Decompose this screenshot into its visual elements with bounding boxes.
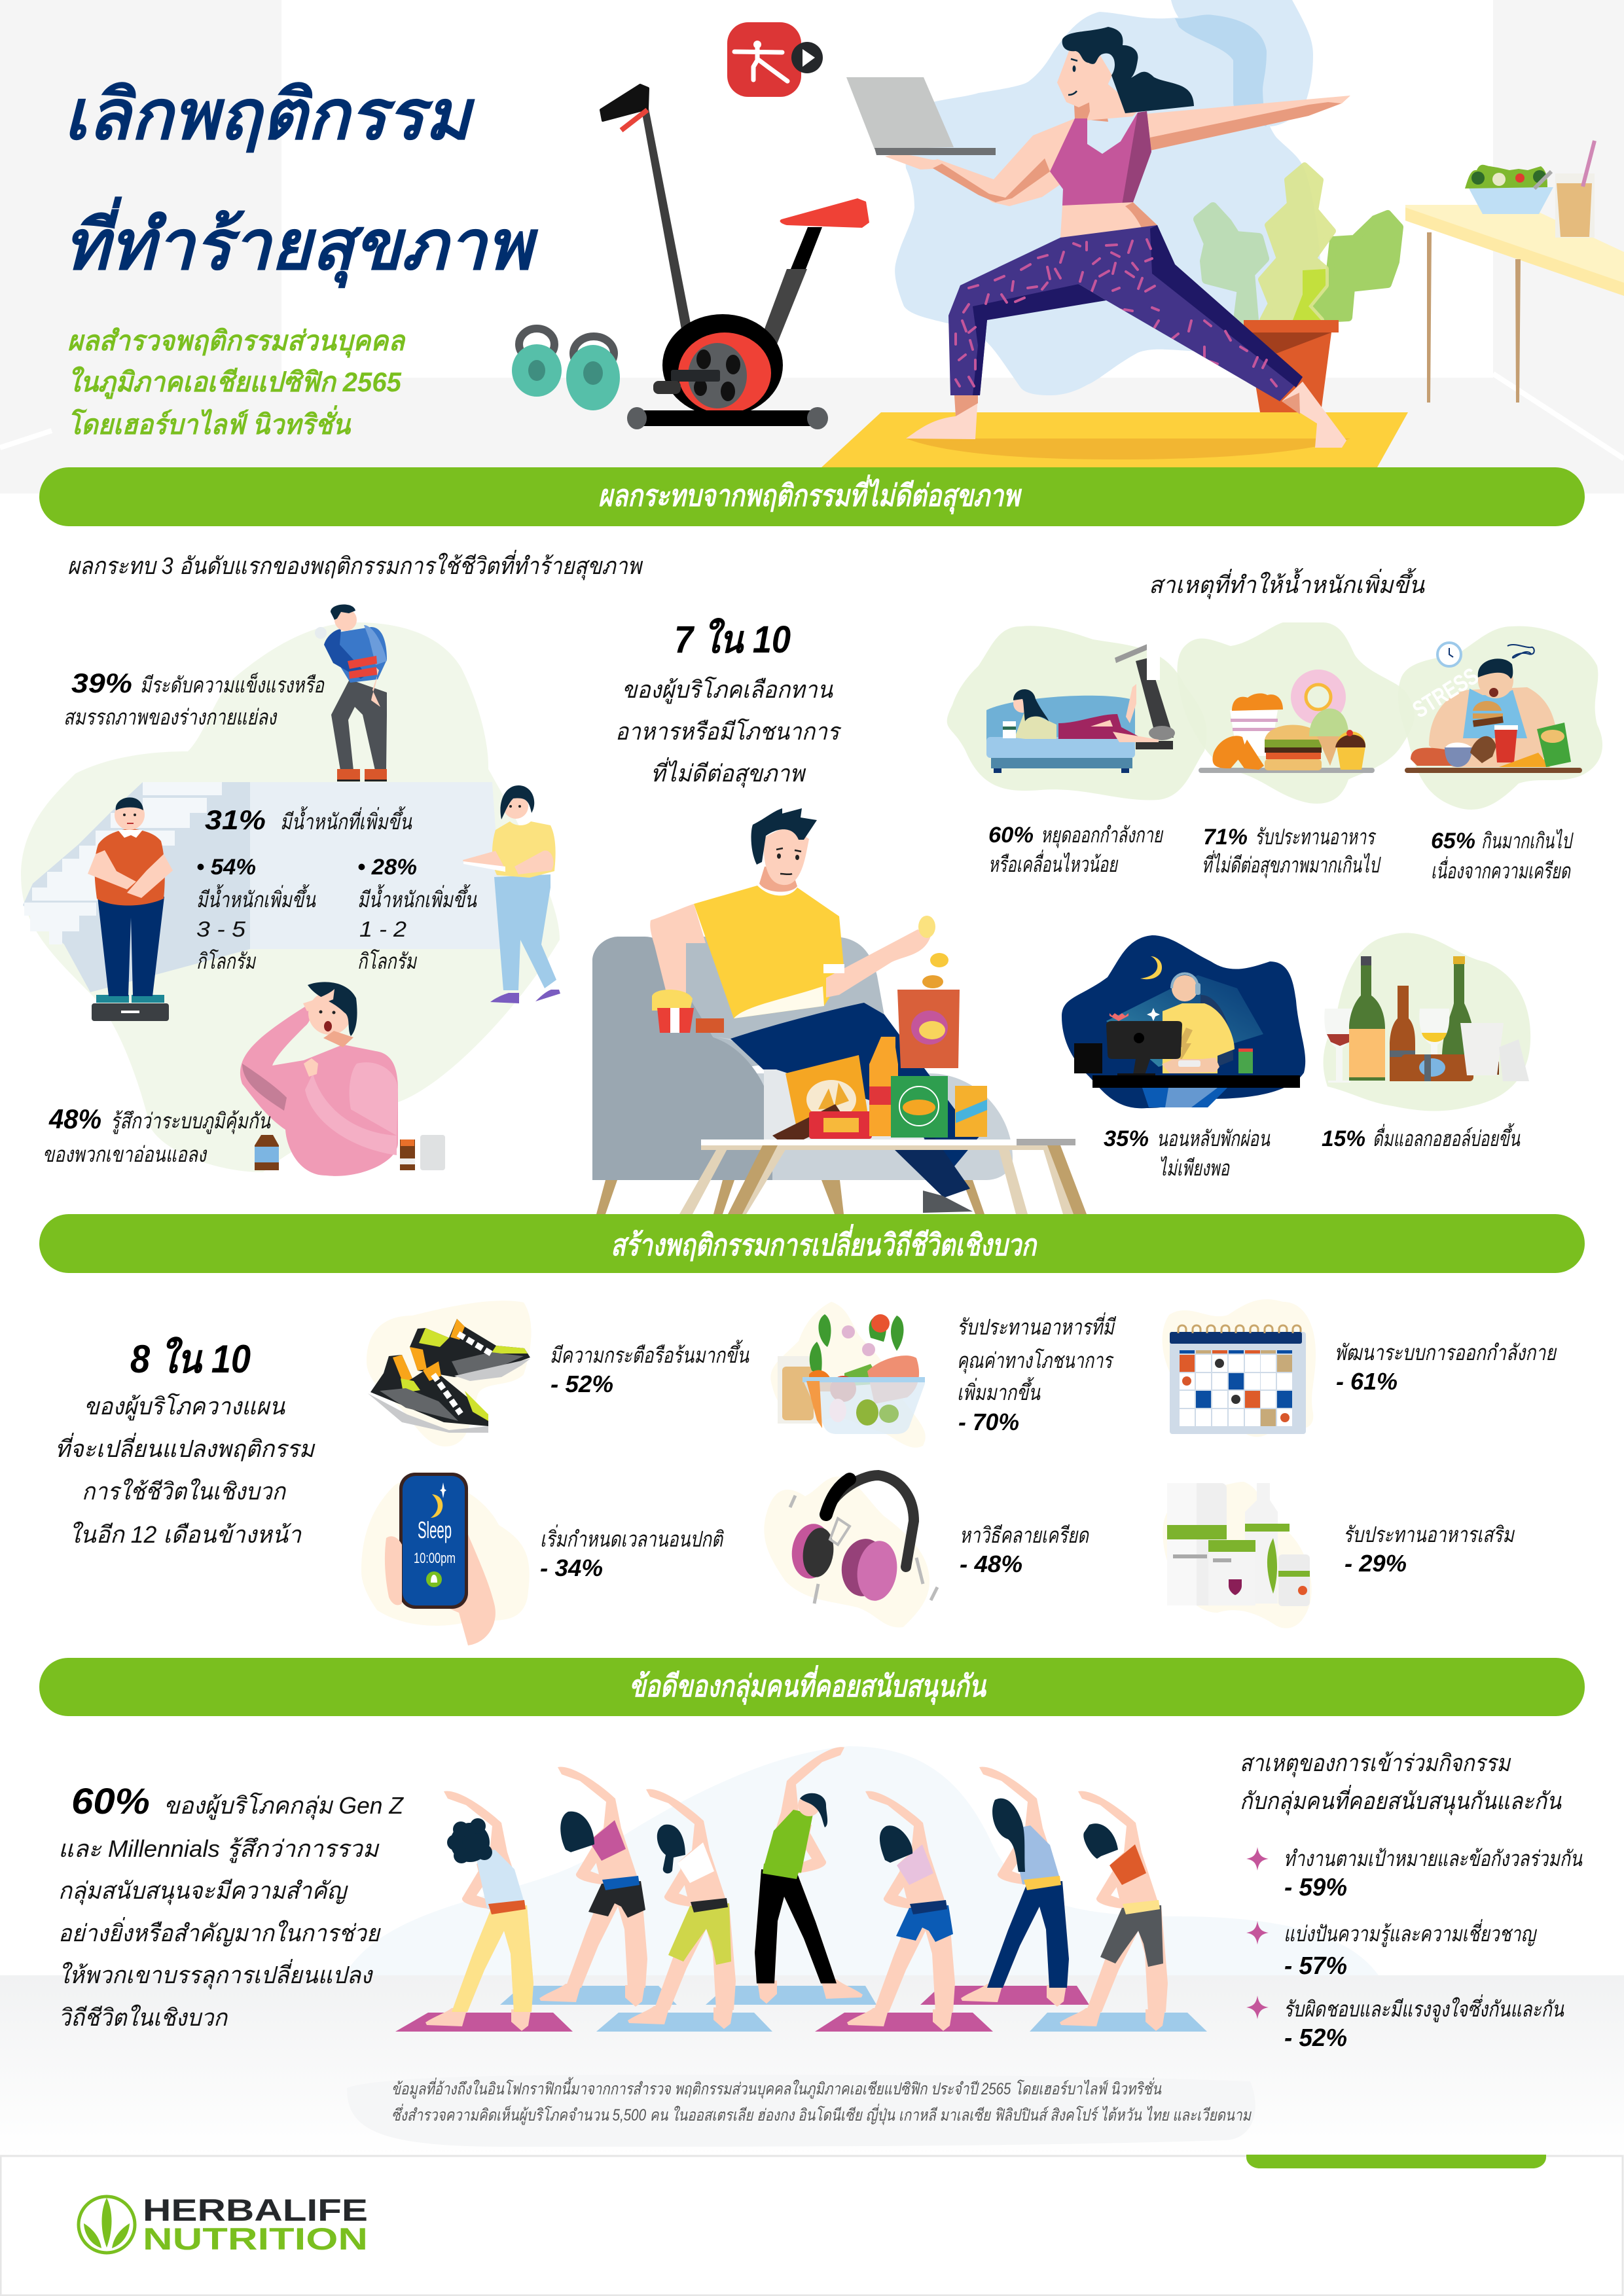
illustration: workout calendar	[1163, 1299, 1316, 1437]
text: nutritious food: - 70%	[958, 1408, 1019, 1435]
text: sleep schedule: - 34%	[540, 1554, 603, 1581]
subtitle: ผลสำรวจพฤติกรรมส่วนบุคคล	[67, 325, 406, 358]
stat: 48% immunity: รู้สึกว่าระบบภูมิคุ้มกัน	[111, 1109, 271, 1134]
stat: 7 in 10: 7 ใน 10	[674, 618, 791, 661]
panel: impact figures background	[21, 622, 560, 1172]
illustration: running shoes	[367, 1300, 532, 1446]
stat: 7 in 10: อาหารหรือมีโภชนาการ	[615, 718, 842, 745]
logo: Herbalife Nutrition	[79, 2193, 368, 2256]
text: stress relief: - 48%	[960, 1551, 1022, 1577]
subtitle: ในภูมิภาคเอเชียแปซิฟิก 2565	[67, 366, 402, 399]
icon: exercise app	[727, 22, 823, 97]
list: reasons: รับผิดชอบและมีแรงจูงใจซึ่งกันและกัน	[1284, 1994, 1564, 2022]
stat: 31% weight gain: • 54%	[196, 855, 256, 880]
stats: causes row 1: 71%	[1203, 825, 1248, 850]
stat: 31% weight gain: กิโลกรัม	[196, 949, 257, 973]
stat: 60 percent supporting group	[58, 1780, 404, 2031]
stat: 31% weight gain: มีน้ำหนักที่เพิ่มขึ้น	[280, 806, 412, 834]
stat: 8 in 10: ที่จะเปลี่ยนแปลงพฤติกรรม	[55, 1432, 316, 1462]
illustration: table with salad and drink	[1405, 141, 1624, 403]
banner: create positive lifestyle change	[39, 1214, 1585, 1273]
text: nutritious food: เพิ่มมากขึ้น	[957, 1377, 1041, 1405]
stat: 39% physical strength: มีระดับความแข็งแรงหรือ	[140, 672, 325, 697]
list: reasons	[1246, 1846, 1583, 2052]
illustration: overweight woman with tape	[463, 785, 560, 1003]
text: workout routine: พัฒนาระบบการออกกำลังกาย	[1335, 1340, 1557, 1365]
stat: 8 in 10	[55, 1336, 316, 1548]
list: reasons: - 57%	[1284, 1952, 1347, 1980]
illustration: sleep phone: Sleep	[418, 1516, 452, 1543]
illustration: unhealthy food	[1177, 622, 1415, 804]
footer box	[1, 2155, 1623, 2295]
text: sleep schedule	[540, 1524, 724, 1581]
stat: 60 percent supporting group: และ Millennials รู้สึกว่าการรวม	[58, 1835, 380, 1863]
text: nutritious food	[957, 1312, 1116, 1435]
stats: causes row 1: 60%	[988, 823, 1034, 848]
stat: 31% weight gain: 31%	[205, 804, 266, 835]
illustration: overweight man on scale	[88, 797, 173, 1021]
stats: causes row 2: 35%	[1104, 1126, 1149, 1151]
stats: causes row 2: 15%	[1322, 1126, 1365, 1151]
stats: causes row 1: ที่ไม่ดีต่อสุขภาพมากเกินไป	[1202, 850, 1381, 878]
banner: create positive lifestyle change: สร้างพฤติกรรมการเปลี่ยนวิถีชีวิตเชิงบวก	[611, 1223, 1038, 1262]
stat: 31% weight gain: 3 - 5	[196, 917, 246, 941]
subtitle: โดยเฮอร์บาไลฟ์ นิวทริชั่น	[67, 405, 352, 440]
stat: 8 in 10: การใช้ชีวิตในเชิงบวก	[82, 1478, 287, 1505]
banner: benefits of support groups	[39, 1658, 1585, 1716]
stat: 31% weight gain: • 28%	[357, 855, 417, 880]
stat: 60 percent supporting group: ของผู้บริโภคกลุ่ม Gen Z	[164, 1792, 404, 1820]
stat: 60 percent supporting group: ให้พวกเขาบรรลุการเปลี่ยนแปลง	[58, 1958, 373, 1990]
stat: 31% weight gain	[196, 804, 477, 973]
stat: 48% immunity: 48%	[48, 1103, 101, 1134]
stats: causes row 1: 65%	[1431, 829, 1475, 853]
illustration: lazy on sofa	[947, 626, 1207, 800]
list: reasons: แบ่งปันความรู้และความเชี่ยวชาญ	[1284, 1919, 1537, 1947]
stat: 60 percent supporting group: กลุ่มสนับสนุนจะมีความสำคัญ	[58, 1877, 348, 1905]
footnote	[391, 2077, 1252, 2125]
logo: Herbalife Nutrition: HERBALIFE	[143, 2193, 368, 2227]
text: workout routine: - 61%	[1336, 1368, 1398, 1395]
banner: impact of unhealthy behaviours	[39, 467, 1585, 526]
illustration: tired man	[315, 604, 387, 781]
banner: benefits of support groups: ข้อดีของกลุ่มคนที่คอยสนับสนุนกัน	[629, 1664, 987, 1705]
stats: causes row 2: นอนหลับพักผ่อน	[1157, 1126, 1271, 1151]
stat: 7 in 10: ของผู้บริโภคเลือกทาน	[622, 676, 833, 704]
subtitle	[67, 325, 406, 440]
illustration: sleep phone: 10:00pm	[414, 1550, 456, 1566]
icon: kettlebells	[512, 329, 620, 410]
text: motivated: - 52%	[550, 1371, 613, 1397]
illustration: woman in yoga pose with laptop	[846, 27, 1350, 448]
banner: impact of unhealthy behaviours: ผลกระทบจากพฤติกรรมที่ไม่ดีต่อสุขภาพ	[598, 474, 1022, 514]
text: supplements	[1343, 1522, 1515, 1577]
text: nutritious food: รับประทานอาหารที่มี	[957, 1312, 1116, 1339]
stats: causes row 1: รับประทานอาหาร	[1255, 825, 1377, 849]
title: เลิกพฤติกรรม	[63, 77, 475, 154]
title: ที่ทำร้ายสุขภาพ	[63, 196, 539, 289]
stat: 8 in 10: ในอีก 12 เดือนข้างหน้า	[69, 1521, 302, 1548]
stats: causes row 1: เนื่องจากความเครียด	[1431, 856, 1571, 883]
footnote: ซึ่งสำรวจความคิดเห็นผู้บริโภคจำนวน 5,500 คน ในออสเตรเลีย ฮ่องกง อินโดนีเซีย ญี่ปุ่น เกาหลี มาเลเซีย ฟิลิปปินส์ สิงคโปร์ ไต้หวัน ไทย และเวียดนาม	[391, 2104, 1252, 2125]
illustration: bottles of alcohol	[1324, 933, 1530, 1111]
text: stress relief: หาวิธีคลายเครียด	[960, 1523, 1089, 1547]
background: exercise floor	[0, 1746, 1624, 2156]
stat: 31% weight gain: มีน้ำหนักเพิ่มขึ้น	[196, 884, 316, 912]
illustration: group stretching	[425, 1747, 1168, 2031]
illustration: man snacking on sofa	[592, 808, 1087, 1214]
illustration: stress eating	[1398, 626, 1602, 810]
heading: top 3 impacts: ผลกระทบ 3 อันดับแรกของพฤติกรรมการใช้ชีวิตที่ทำร้ายสุขภาพ	[67, 549, 643, 581]
stat: 31% weight gain: มีน้ำหนักเพิ่มขึ้น	[357, 884, 477, 912]
illustration: healthy bowl	[770, 1302, 926, 1448]
stat: 31% weight gain: กิโลกรัม	[357, 949, 418, 973]
illustration: plant in pot	[1198, 166, 1399, 412]
illustration: exercise bike	[601, 85, 869, 429]
stat: 48% immunity	[43, 1103, 271, 1166]
illustration: sick man in pink	[240, 982, 445, 1176]
stat: 60 percent supporting group: อย่างยิ่งหรือสำคัญมากในการช่วย	[58, 1916, 382, 1947]
stats: causes row 1: กินมากเกินไป	[1481, 829, 1574, 853]
stat: 7 in 10	[615, 618, 842, 788]
text: workout routine	[1335, 1340, 1557, 1395]
illustration: stress eating: STRESS	[1408, 662, 1483, 723]
heading: reasons for joining: สาเหตุของการเข้าร่วมกิจกรรม	[1240, 1749, 1511, 1778]
stat: 8 in 10: 8 ใน 10	[130, 1336, 251, 1381]
text: motivated	[550, 1340, 749, 1397]
stat: 8 in 10: ของผู้บริโภควางแผน	[84, 1393, 285, 1421]
stat: 39% physical strength	[63, 668, 325, 729]
text: nutritious food: คุณค่าทางโภชนาการ	[957, 1348, 1114, 1374]
text: sleep schedule: เริ่มกำหนดเวลานอนปกติ	[540, 1524, 724, 1551]
stats: causes row 1: หยุดออกกำลังกาย	[1041, 823, 1164, 848]
list: reasons: - 59%	[1284, 1874, 1347, 1901]
text: stress relief	[960, 1523, 1089, 1577]
stat: 39% physical strength: 39%	[71, 668, 132, 698]
text: motivated: มีความกระตือรือร้นมากขึ้น	[550, 1340, 749, 1367]
heading: reasons for joining	[1240, 1749, 1562, 1816]
list: reasons: - 52%	[1284, 2024, 1347, 2052]
illustration: yoga mat	[821, 412, 1408, 467]
stats: causes row 1	[988, 823, 1574, 883]
illustration: sleep phone	[361, 1473, 530, 1645]
stats: causes row 2: ดื่มแอลกอฮอล์บ่อยขึ้น	[1373, 1123, 1521, 1151]
stats: causes row 2: ไม่เพียงพอ	[1159, 1156, 1230, 1180]
illustration: yoga mats	[395, 1986, 1207, 2032]
hero background room	[0, 0, 1624, 493]
illustration: late night gamer	[1062, 935, 1305, 1108]
stats: causes row 1: หรือเคลื่อนไหวน้อย	[988, 850, 1119, 876]
text: supplements: - 29%	[1344, 1550, 1407, 1577]
stat: 31% weight gain: 1 - 2	[359, 917, 406, 941]
stats: causes row 2	[1104, 1123, 1521, 1180]
logo: Herbalife Nutrition: NUTRITION	[143, 2221, 368, 2256]
title	[63, 77, 539, 289]
stat: 48% immunity: ของพวกเขาอ่อนแอลง	[43, 1142, 208, 1166]
stat: 7 in 10: ที่ไม่ดีต่อสุขภาพ	[651, 757, 806, 788]
heading: causes of weight gain: สาเหตุที่ทำให้น้ำหนักเพิ่มขึ้น	[1149, 567, 1425, 600]
illustration: supplements	[1163, 1482, 1312, 1628]
stat: 60 percent supporting group: 60%	[71, 1780, 150, 1821]
heading: reasons for joining: กับกลุ่มคนที่คอยสนับสนุนกันและกัน	[1240, 1784, 1562, 1816]
stat: 60 percent supporting group: วิถีชีวิตในเชิงบวก	[58, 2004, 228, 2031]
text: supplements: รับประทานอาหารเสริม	[1343, 1522, 1515, 1547]
illustration: headphones	[764, 1475, 937, 1627]
stat: 39% physical strength: สมรรถภาพของร่างกายแย่ลง	[63, 705, 278, 729]
footnote: ข้อมูลที่อ้างถึงในอินโฟกราฟิกนี้มาจากการสำรวจ พฤติกรรมส่วนบุคคลในภูมิภาคเอเชียแปซิฟิก ประจำปี 2565 โดยเฮอร์บาไลฟ์ นิวทริชั่น	[391, 2077, 1162, 2099]
